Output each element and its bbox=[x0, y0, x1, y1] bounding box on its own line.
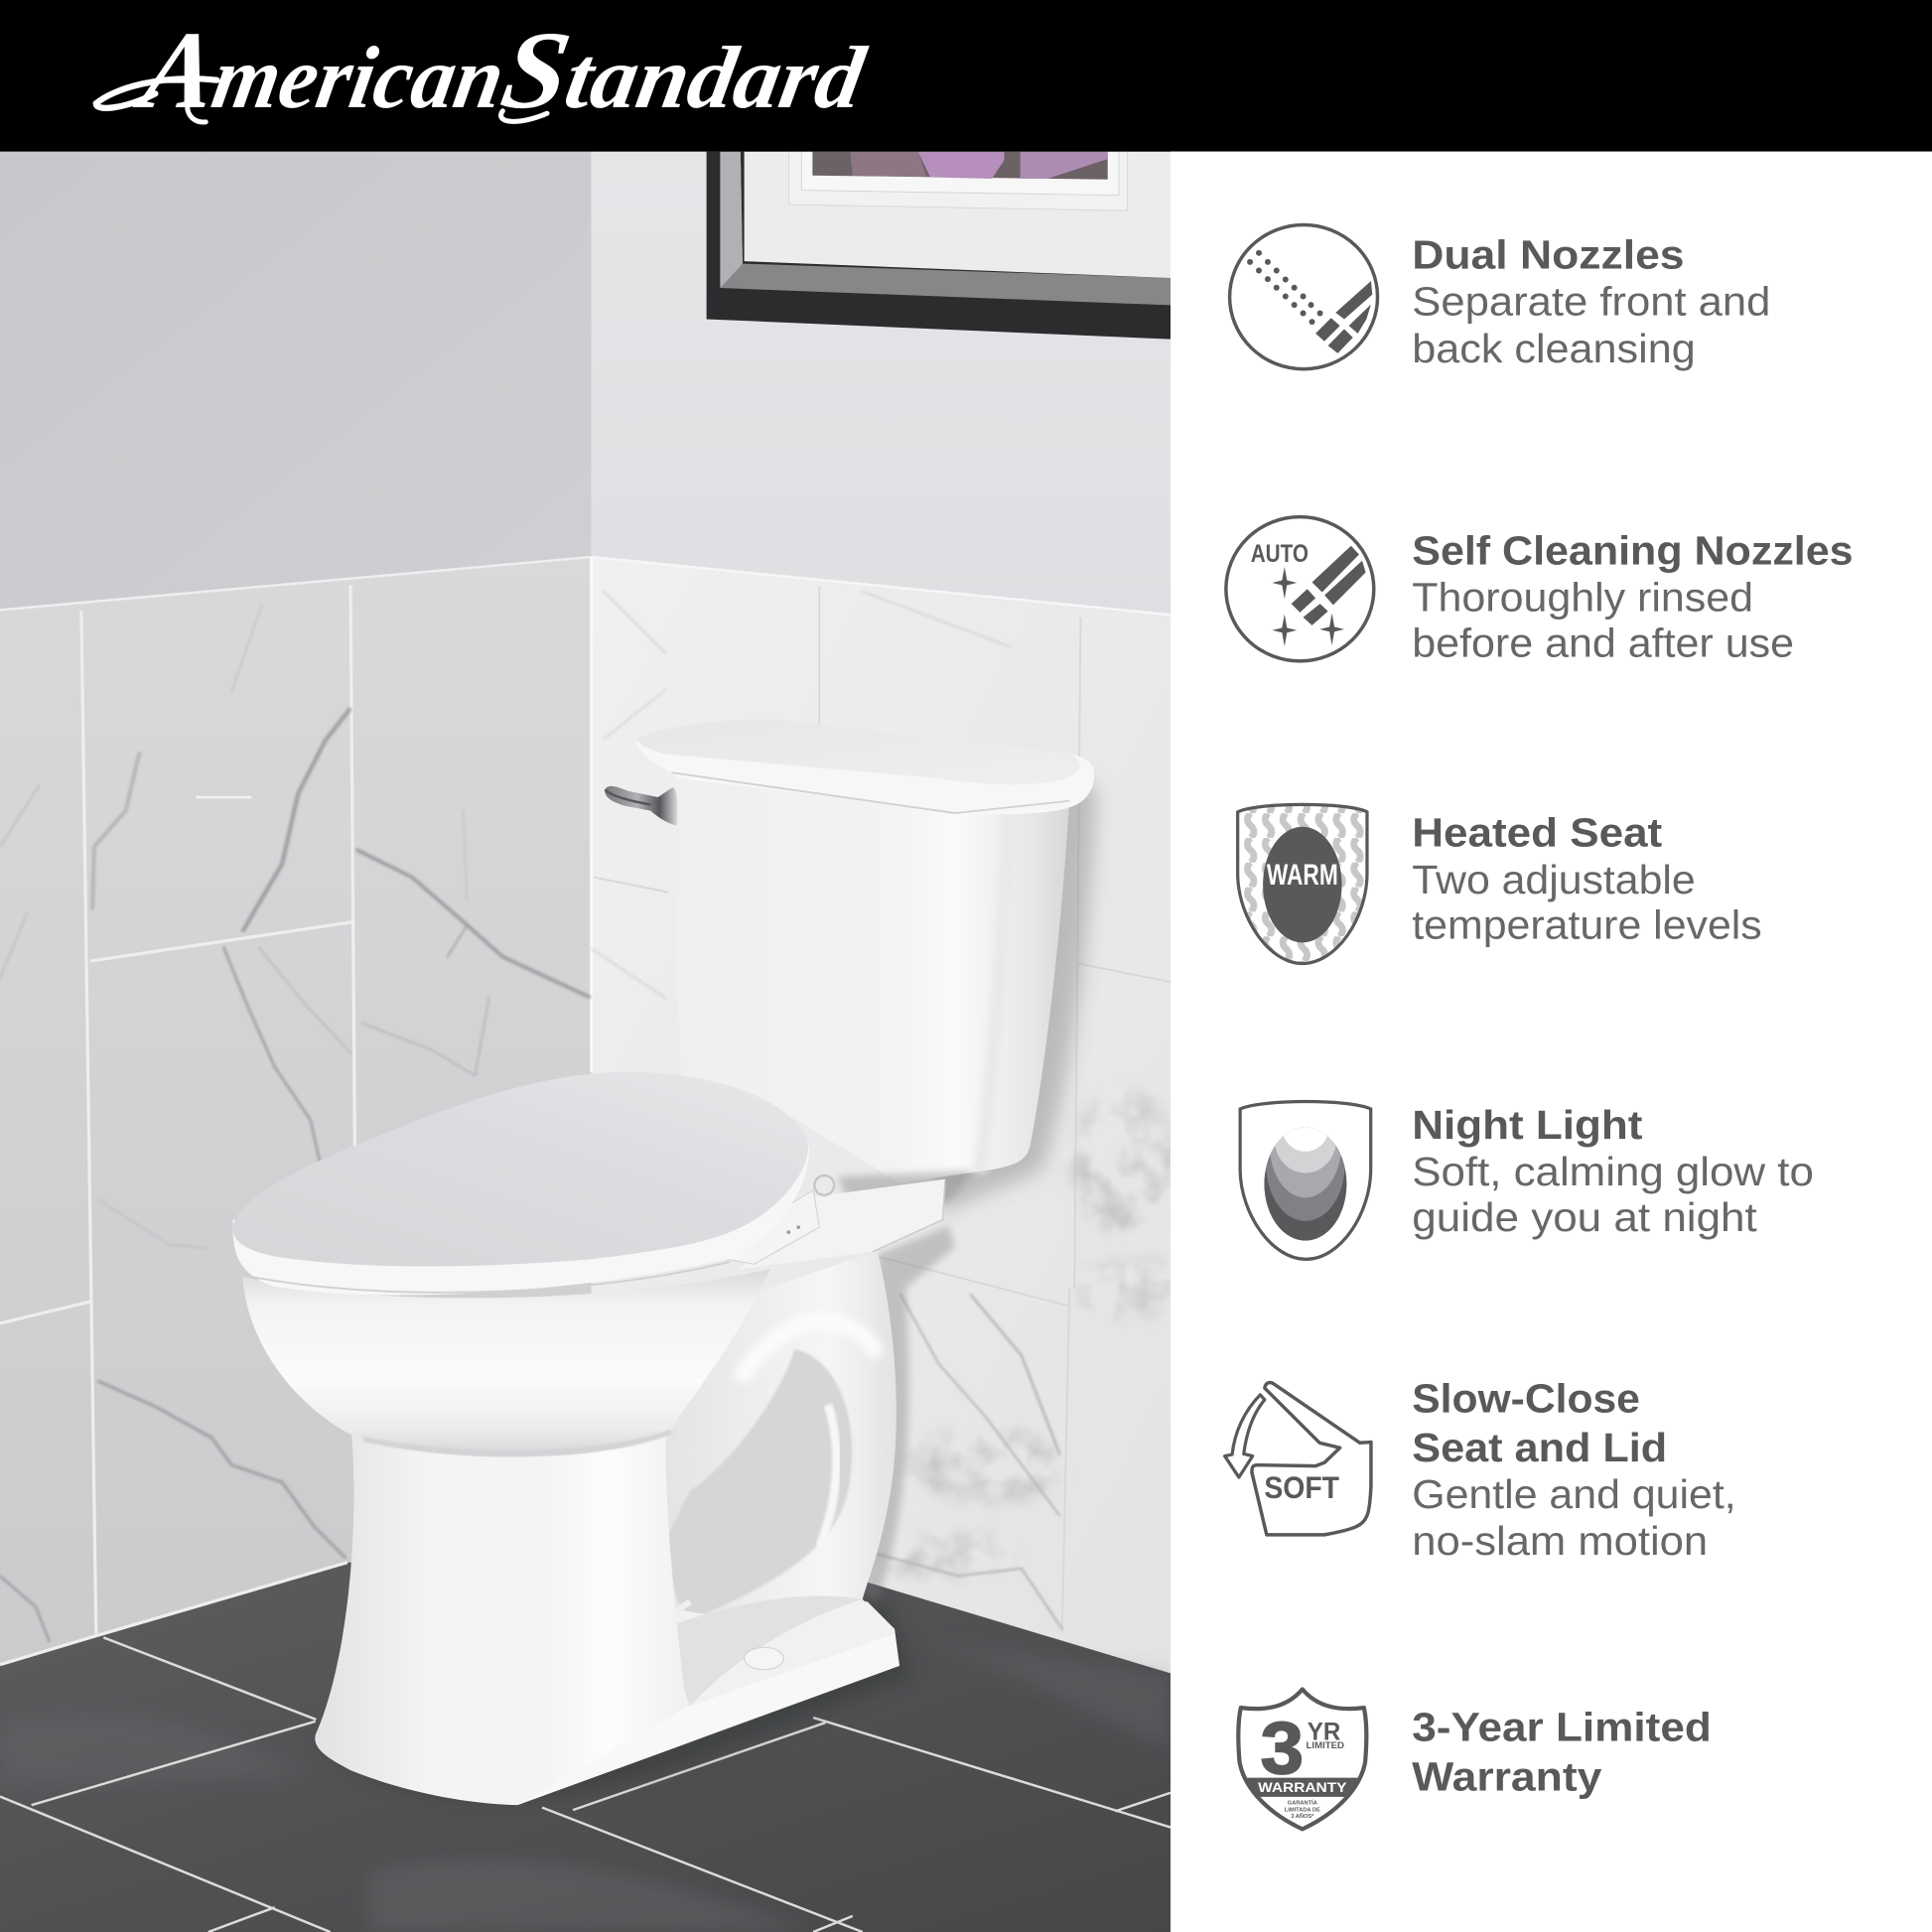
description: dual nozzles bbox=[1412, 279, 1770, 371]
seat control box and hose bbox=[727, 1175, 834, 1264]
feature: self cleaning nozzles bbox=[1226, 517, 1854, 665]
icon: 3-year warranty shield bbox=[1238, 1690, 1366, 1829]
icon: 3-year warranty shield: LIMITED bbox=[1307, 1740, 1344, 1750]
description: night light: guide you at night bbox=[1412, 1194, 1757, 1240]
feature: dual nozzles bbox=[1230, 224, 1770, 371]
flush handle bbox=[605, 786, 678, 826]
logo: American Standard bbox=[96, 10, 877, 132]
tank shadow on wall bbox=[936, 776, 1097, 1213]
icon: 3-year warranty shield: YR bbox=[1308, 1719, 1340, 1745]
icon: self cleaning nozzles: AUTO bbox=[1251, 541, 1309, 568]
icon: 3-year warranty shield: GARANTÍA bbox=[1288, 1799, 1317, 1807]
description: heated seat: temperature levels bbox=[1412, 902, 1762, 948]
base flange bbox=[517, 1634, 899, 1805]
heading: Self Cleaning Nozzles: Self Cleaning Nozzles bbox=[1412, 527, 1854, 573]
toilet tank body bbox=[671, 773, 1069, 1182]
icon: 3-year warranty shield: LIMITADA DE bbox=[1285, 1807, 1320, 1813]
icon: dual nozzles bbox=[1230, 224, 1378, 369]
icon: night light bbox=[1240, 1094, 1371, 1259]
description: dual nozzles: Separate front and bbox=[1412, 279, 1770, 325]
marble veins bbox=[0, 592, 1062, 1641]
icon: heated seat: WARM bbox=[1267, 859, 1338, 892]
icon: heated seat bbox=[1232, 801, 1374, 967]
description: slow-close: Gentle and quiet, bbox=[1412, 1471, 1736, 1517]
heading: Slow-Close Seat and Lid bbox=[1412, 1375, 1667, 1470]
feature: night light bbox=[1240, 1094, 1814, 1259]
icon: slow-close seat: SOFT bbox=[1264, 1470, 1339, 1505]
heading: Dual Nozzles: Dual Nozzles bbox=[1412, 232, 1685, 278]
seat rim bbox=[233, 1146, 809, 1296]
feature: slow-close seat and lid bbox=[1225, 1375, 1736, 1564]
heading: Night Light: Night Light bbox=[1412, 1102, 1643, 1148]
description: heated seat bbox=[1412, 857, 1762, 948]
description: heated seat: Two adjustable bbox=[1412, 857, 1696, 902]
floor shadow and trapway side bbox=[316, 1251, 911, 1798]
icon: 3-year warranty shield: 3 AÑOS* bbox=[1291, 1813, 1314, 1820]
feature: warranty bbox=[1238, 1690, 1712, 1829]
heading: Heated Seat: Heated Seat bbox=[1412, 810, 1663, 856]
icon: self cleaning nozzles bbox=[1226, 517, 1374, 661]
description: dual nozzles: back cleansing bbox=[1412, 326, 1696, 371]
feature: heated seat bbox=[1232, 801, 1762, 967]
tank to bowl connector bbox=[740, 1171, 973, 1269]
description: slow-close bbox=[1412, 1471, 1736, 1564]
heading: Slow-Close Seat and Lid: Slow-Close bbox=[1412, 1375, 1640, 1421]
description: self cleaning nozzles: before and after use bbox=[1412, 620, 1794, 665]
icon: 3-year warranty shield: WARRANTY bbox=[1258, 1780, 1346, 1795]
logo: American Standard: American bbox=[128, 10, 515, 132]
description: night light: Soft, calming glow to bbox=[1412, 1149, 1814, 1194]
bowl bbox=[242, 1269, 770, 1456]
framed picture bbox=[707, 152, 1171, 340]
heading: Slow-Close Seat and Lid: Seat and Lid bbox=[1412, 1425, 1667, 1470]
description: night light bbox=[1412, 1149, 1814, 1240]
bowl pedestal bbox=[315, 1430, 690, 1805]
trapway and connector shadow on wall bbox=[850, 1226, 955, 1601]
marble cloud patches bbox=[881, 1090, 1179, 1580]
description: self cleaning nozzles bbox=[1412, 575, 1794, 665]
heading: 3-Year Limited Warranty bbox=[1412, 1705, 1712, 1799]
icon: 3-year warranty shield: 3 bbox=[1261, 1707, 1304, 1789]
toilet tank lid bbox=[636, 719, 1094, 814]
description: slow-close: no-slam motion bbox=[1412, 1518, 1708, 1564]
tile grout lines bbox=[0, 557, 1171, 1665]
left upper wall bbox=[0, 152, 592, 612]
toilet bbox=[233, 719, 1094, 1805]
floor tiles bbox=[0, 1563, 1171, 1932]
right tiled wall bbox=[592, 557, 1171, 1676]
logo: American Standard: Standard bbox=[493, 10, 877, 132]
white feature panel bbox=[1171, 152, 1932, 1932]
heading: 3-Year Limited Warranty: 3-Year Limited bbox=[1412, 1705, 1712, 1750]
right upper wall bbox=[592, 152, 1171, 615]
photo: bathroom with toilet bbox=[0, 152, 1179, 1932]
header bar bbox=[0, 0, 1932, 152]
left tiled wall bbox=[0, 557, 592, 1666]
description: self cleaning nozzles: Thoroughly rinsed bbox=[1412, 575, 1753, 621]
heading: 3-Year Limited Warranty: Warranty bbox=[1412, 1753, 1602, 1799]
icon: slow-close seat bbox=[1225, 1383, 1371, 1535]
seat lid top bbox=[233, 1072, 808, 1267]
